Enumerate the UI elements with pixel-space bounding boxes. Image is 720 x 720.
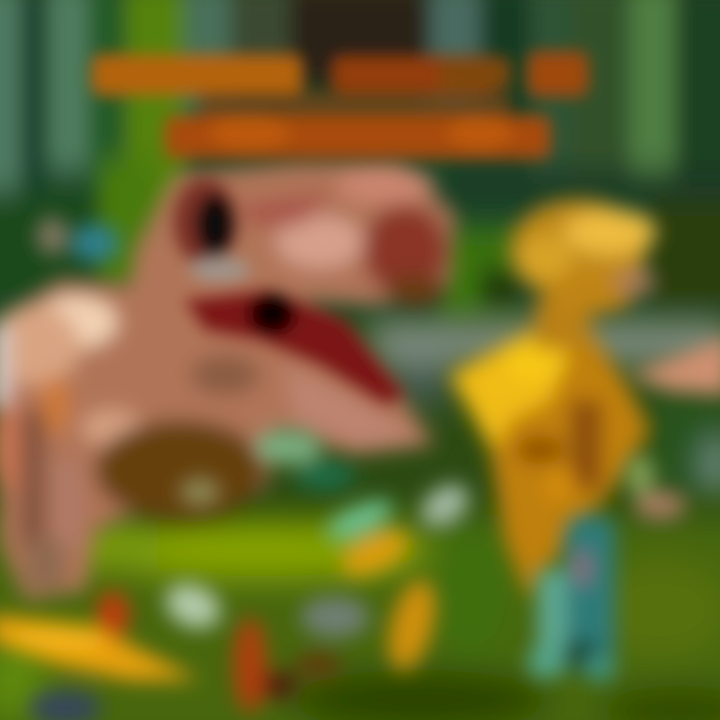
- right side: pink creature: [626, 335, 720, 519]
- background: forest: [0, 0, 720, 320]
- dinosaur: teal leg: [528, 515, 616, 681]
- small teal creature: [38, 218, 119, 261]
- title: [92, 52, 588, 158]
- background: rocks and path: [370, 320, 720, 495]
- dinosaur: pink body: [0, 162, 455, 600]
- ground: grass: [0, 515, 720, 720]
- dinosaur: open mouth: [185, 290, 405, 405]
- foreground: plants and small figures: [0, 430, 477, 720]
- dinosaur: eye: [173, 178, 250, 282]
- dinosaur: yellow body: [450, 200, 656, 600]
